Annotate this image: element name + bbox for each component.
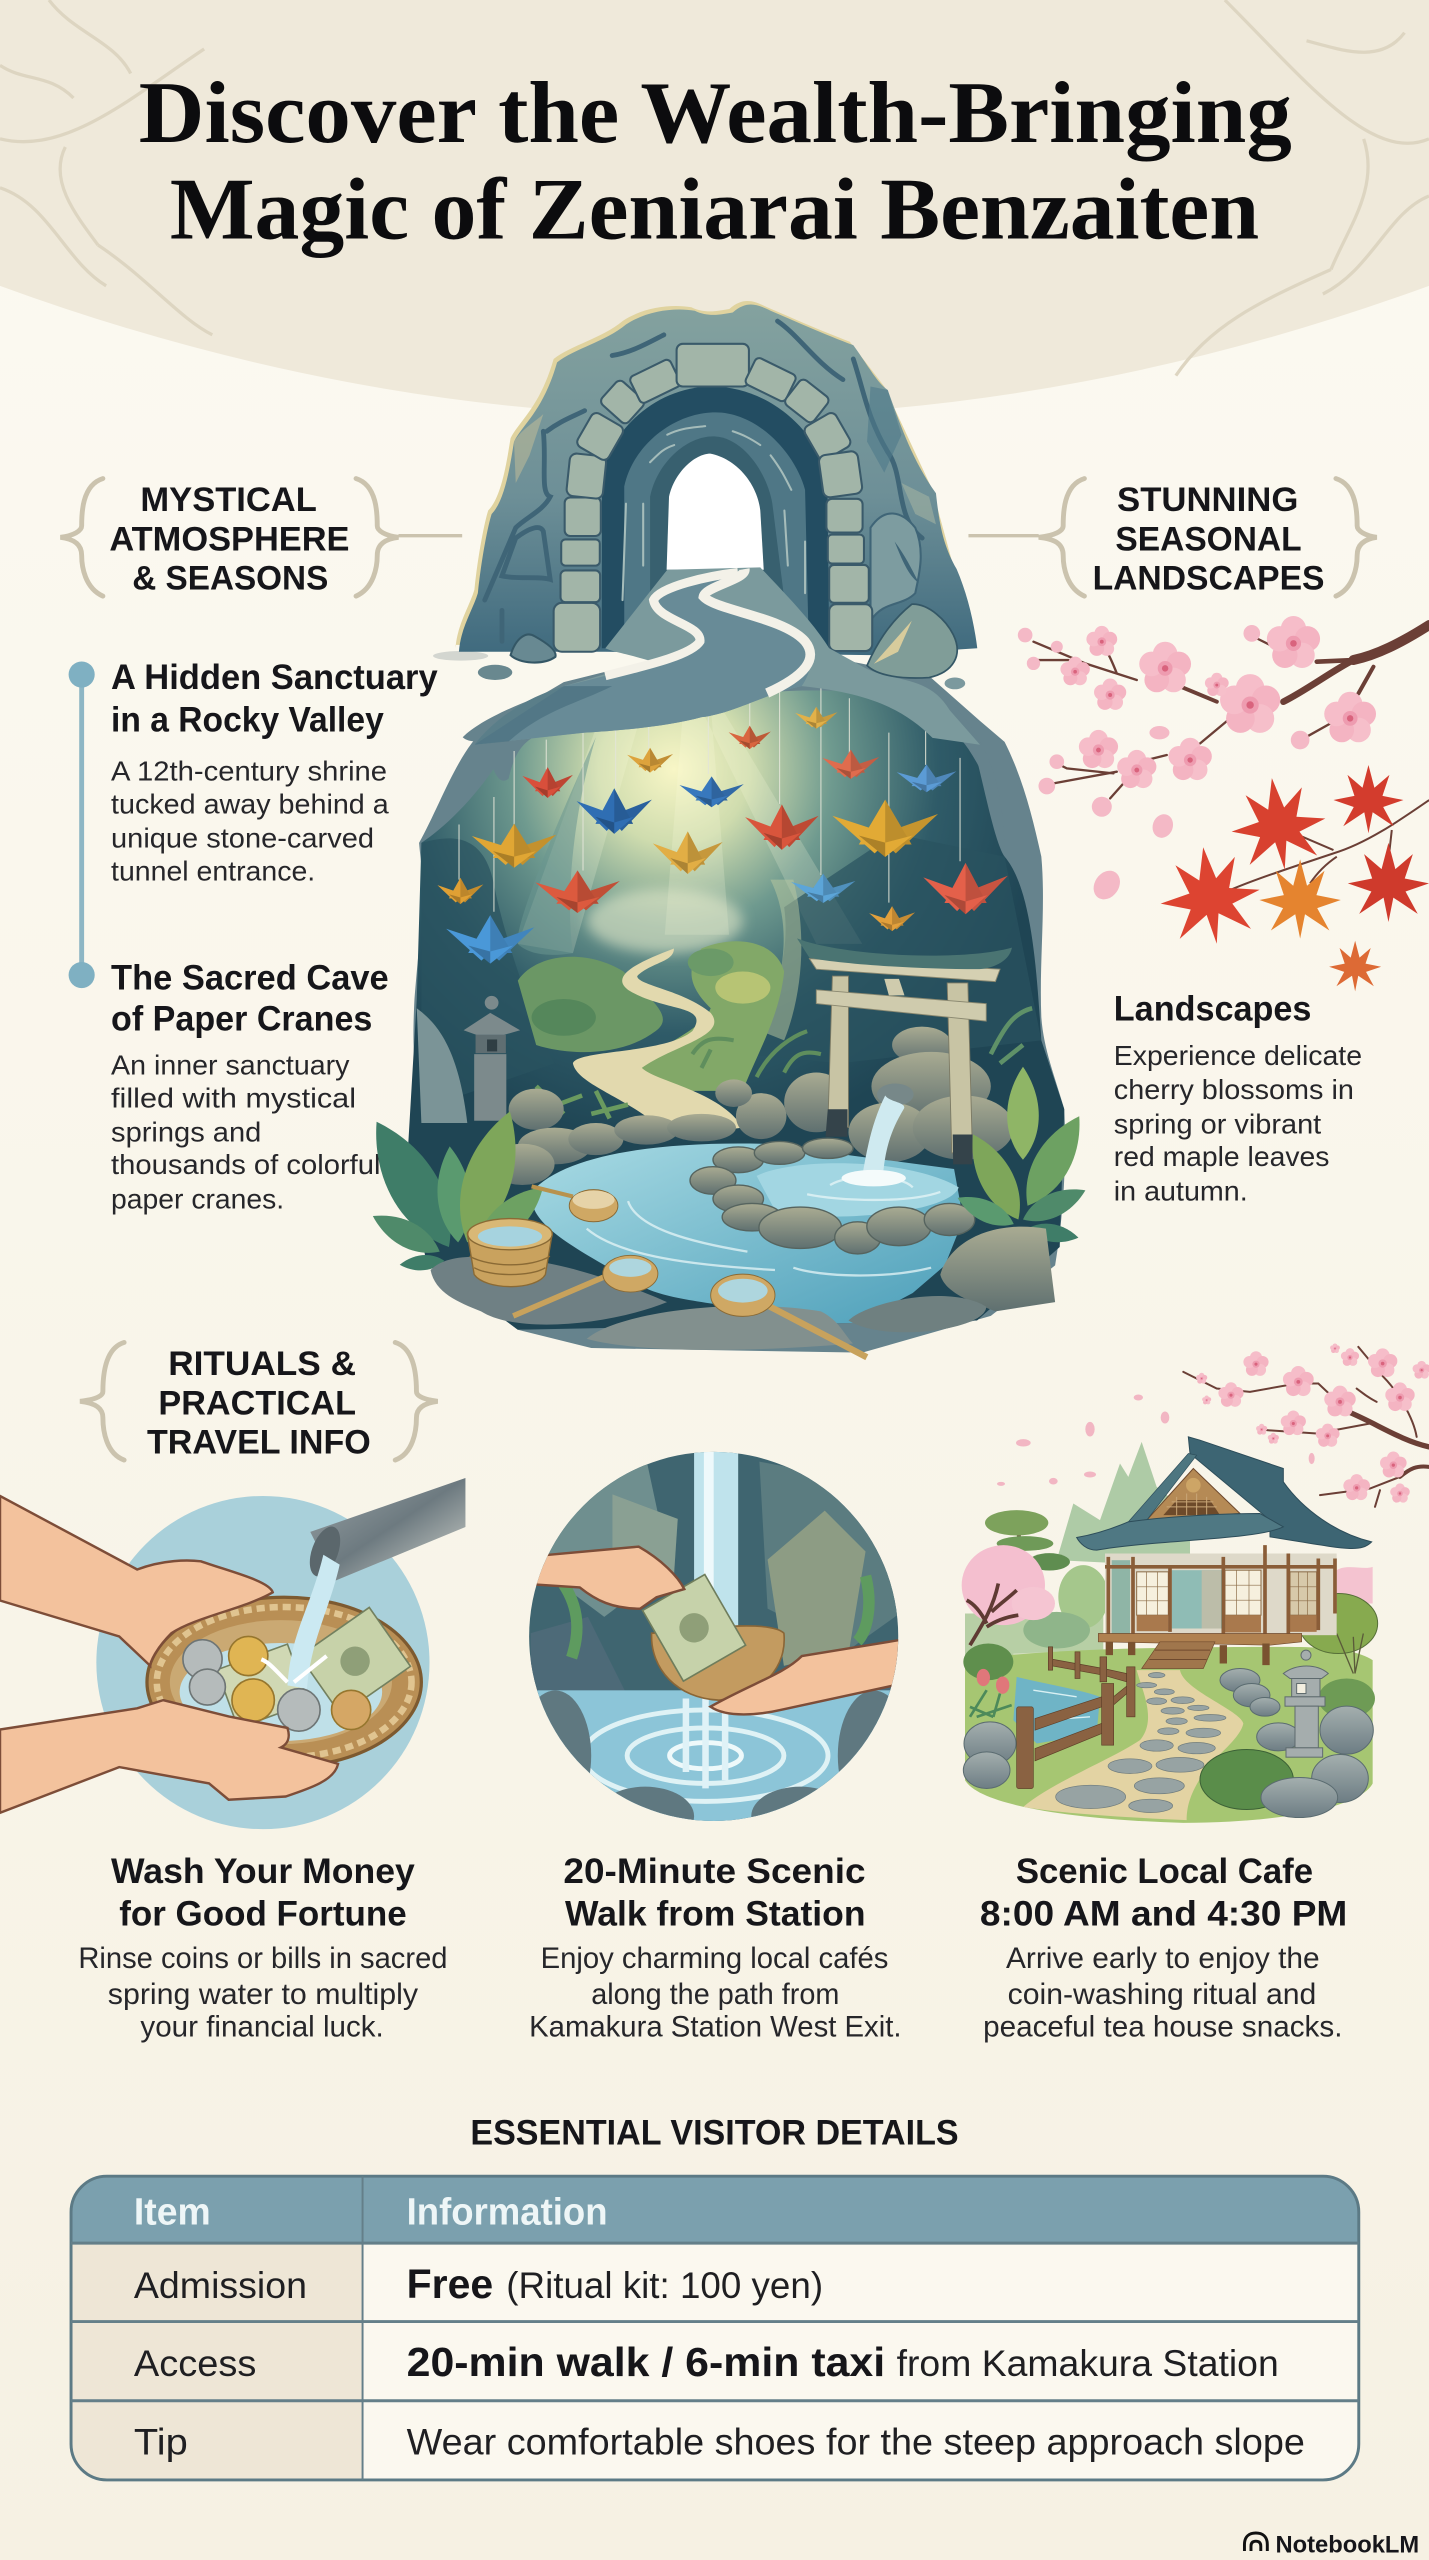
road mound	[474, 567, 980, 745]
text block: landscapes: Experience delicate	[1114, 1040, 1362, 1071]
spout and waterfall	[842, 1084, 914, 1186]
cave roof	[463, 655, 1005, 857]
text block: scenic local cafe: Scenic Local Cafe	[1016, 1852, 1313, 1891]
illustration: red maple leaves	[1154, 765, 1429, 991]
hand right	[710, 1640, 901, 1714]
pine	[985, 1510, 1070, 1571]
text block: hidden sanctuary: unique stone-carved	[111, 823, 374, 854]
table: visitor details	[71, 2176, 1359, 2480]
rock body	[459, 304, 977, 655]
row: access: from Kamakura Station	[897, 2343, 1279, 2384]
panel: mystical atmosphere heading: ATMOSPHERE	[109, 520, 349, 558]
road surface	[474, 569, 810, 745]
water	[531, 1143, 963, 1330]
panel: rituals heading	[80, 1342, 438, 1462]
text block: scenic walk: along the path from	[591, 1978, 839, 2011]
stepping stones	[1056, 1673, 1226, 1813]
rocks	[963, 1669, 1373, 1789]
timeline connector	[69, 661, 95, 988]
icon: washing money in a basket	[0, 1478, 465, 1829]
text block: sacred cave: thousands of colorful	[111, 1149, 381, 1180]
row: admission: (Ritual kit: 100 yen)	[506, 2265, 823, 2306]
far rocks	[490, 1027, 1014, 1185]
text block: hidden sanctuary: tunnel entrance.	[111, 855, 315, 886]
text block: scenic local cafe: coin-washing ritual and	[1008, 1978, 1316, 2011]
arch stones	[554, 344, 872, 652]
header band with ink pattern	[0, 0, 1429, 416]
text block: wash your money: your financial luck.	[140, 2011, 384, 2044]
text block: landscapes: spring or vibrant	[1114, 1108, 1322, 1139]
text block: sacred cave: paper cranes.	[111, 1184, 284, 1215]
text block: sacred cave: An inner sanctuary	[111, 1050, 350, 1081]
table header row	[134, 2190, 608, 2232]
text block: wash your money: Rinse coins or bills in sacred	[78, 1942, 447, 1975]
panel: rituals heading: RITUALS &	[168, 1345, 356, 1383]
icon: cafe tea house garden	[962, 1437, 1378, 1823]
row: access: 20-min walk / 6-min taxi	[407, 2339, 885, 2385]
text block: scenic local cafe: peaceful tea house snacks.	[983, 2011, 1342, 2044]
panel: mystical atmosphere heading	[60, 479, 462, 598]
title	[139, 64, 1292, 258]
row: tip: Wear comfortable shoes for the steep approach slope	[407, 2422, 1305, 2463]
stone lantern	[464, 996, 520, 1121]
table header row: Information	[407, 2190, 608, 2232]
paper cranes	[437, 707, 1008, 964]
white path edges	[605, 573, 738, 676]
water	[1013, 1677, 1100, 1744]
forest	[518, 941, 821, 1137]
text block: wash your money: for Good Fortune	[119, 1894, 407, 1933]
heading: essential visitor details: ESSENTIAL VISITOR DETAILS	[470, 2113, 959, 2152]
illustration: stone tunnel entrance	[433, 301, 980, 745]
hand left	[531, 1547, 684, 1609]
panel: mystical atmosphere heading: & SEASONS	[132, 560, 328, 598]
row: admission	[134, 2261, 823, 2307]
illustration: cave of paper cranes	[355, 650, 1100, 1370]
logo: NotebookLM: NotebookLM	[1275, 2532, 1419, 2559]
tea house	[1077, 1437, 1372, 1669]
upper hand	[0, 1496, 273, 1666]
text block: scenic local cafe: Arrive early to enjoy the	[1006, 1942, 1320, 1975]
text block: sacred cave: of Paper Cranes	[111, 1000, 372, 1039]
text block: landscapes	[1114, 990, 1362, 1206]
text block: hidden sanctuary: A Hidden Sanctuary	[111, 658, 438, 697]
panel: stunning landscapes heading: STUNNING	[1117, 481, 1298, 519]
row: tip: Tip	[134, 2422, 188, 2463]
row: admission: Admission	[134, 2265, 307, 2306]
panel: mystical atmosphere heading: MYSTICAL	[140, 481, 317, 519]
text block: landscapes: cherry blossoms in	[1114, 1074, 1354, 1105]
text block: scenic local cafe	[980, 1852, 1347, 2044]
text block: hidden sanctuary: A 12th-century shrine	[111, 756, 387, 787]
text block: scenic walk: 20-Minute Scenic	[563, 1852, 866, 1891]
row: access: Access	[134, 2343, 256, 2384]
rock silhouette highlight	[455, 301, 974, 648]
path	[1023, 1670, 1243, 1820]
icon: scenic walk spring scene	[529, 1452, 898, 1821]
title: Magic of Zeniarai Benzaiten	[170, 160, 1259, 258]
fence	[1017, 1647, 1135, 1789]
upper roof	[1188, 1437, 1372, 1548]
lower hand	[0, 1700, 338, 1813]
distant mountains	[1057, 1442, 1190, 1567]
text block: scenic walk: Walk from Station	[565, 1894, 866, 1933]
panel: rituals heading: TRAVEL INFO	[147, 1424, 371, 1462]
ground	[965, 1647, 1373, 1823]
row: admission: Free	[407, 2261, 493, 2307]
text block: sacred cave: The Sacred Cave	[111, 959, 389, 998]
text block: landscapes: red maple leaves	[1114, 1141, 1329, 1172]
text block: scenic local cafe: 8:00 AM and 4:30 PM	[980, 1894, 1347, 1933]
text block: landscapes: Landscapes	[1114, 990, 1311, 1029]
text block: scenic walk	[529, 1852, 901, 2044]
table header row: Item	[134, 2190, 211, 2232]
basket	[652, 1626, 784, 1700]
hedge and front rocks	[1200, 1750, 1368, 1818]
lower roof	[1077, 1514, 1283, 1550]
tunnel light opening	[667, 454, 764, 570]
panel: rituals heading: PRACTICAL	[158, 1384, 356, 1422]
pink tree	[962, 1545, 1055, 1645]
rock facets	[485, 321, 922, 641]
panel: stunning landscapes heading: LANDSCAPES	[1093, 560, 1324, 598]
text block: hidden sanctuary	[111, 658, 438, 886]
text block: hidden sanctuary: in a Rocky Valley	[111, 701, 384, 740]
leaves left	[355, 1104, 553, 1272]
illustration: cherry branch above cafe	[997, 1343, 1429, 1507]
right tree	[1299, 1594, 1378, 1719]
left bushes and tulips	[963, 1644, 1013, 1717]
text block: scenic walk: Kamakura Station West Exit.	[529, 2011, 901, 2044]
stone ring	[690, 1138, 975, 1254]
pink tree right	[1337, 1567, 1373, 1604]
text block: wash your money: spring water to multiply	[108, 1978, 418, 2011]
gable	[1147, 1469, 1240, 1520]
wooden bucket and ladles	[467, 1186, 867, 1357]
text block: hidden sanctuary: tucked away behind a	[111, 788, 389, 819]
text block: wash your money: Wash Your Money	[111, 1852, 415, 1891]
stone lantern	[1283, 1650, 1328, 1757]
panel: stunning landscapes heading	[968, 479, 1377, 598]
text block: landscapes: in autumn.	[1114, 1175, 1248, 1206]
text block: scenic walk: Enjoy charming local cafés	[541, 1942, 888, 1975]
illustration: cherry blossom branch	[1018, 616, 1429, 904]
foreground rocks	[431, 1227, 1055, 1350]
text block: sacred cave	[111, 959, 389, 1215]
hanging strings	[459, 684, 960, 912]
torii gate	[797, 938, 1012, 1164]
small rocks	[478, 604, 965, 689]
panel: stunning landscapes heading: SEASONAL	[1115, 520, 1302, 558]
row: access	[134, 2339, 1279, 2385]
leaves right	[953, 1067, 1094, 1246]
title: Discover the Wealth-Bringing	[139, 64, 1292, 162]
text block: wash your money	[78, 1852, 447, 2044]
text block: sacred cave: springs and	[111, 1117, 261, 1148]
text block: sacred cave: filled with mystical	[111, 1082, 356, 1113]
pale background trees	[965, 1614, 1103, 1660]
tunnel interior	[602, 387, 829, 648]
